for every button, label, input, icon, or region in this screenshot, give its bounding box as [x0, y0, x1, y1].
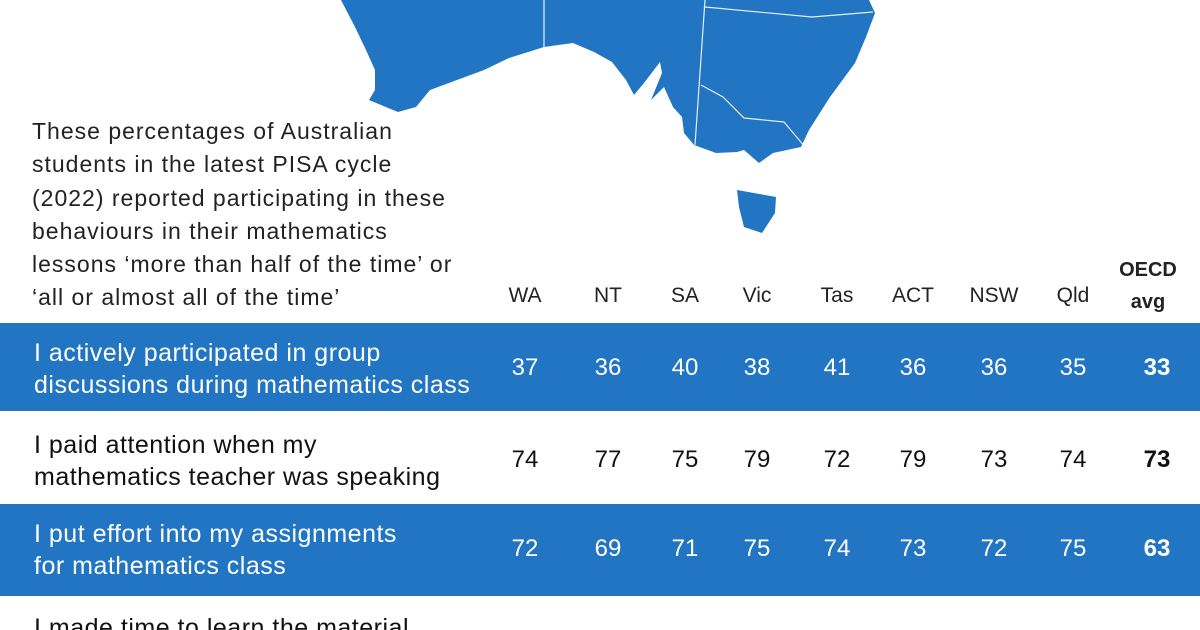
row 2: 74 [512, 446, 538, 473]
column headers: OECD [1119, 259, 1177, 281]
row 2: 79 [744, 446, 770, 473]
row 2: 73 [1144, 446, 1170, 473]
intro text: These percentages of Australian [32, 118, 393, 144]
row 3 [0, 504, 1200, 596]
row 1: 36 [900, 354, 926, 381]
column headers: WA [508, 284, 542, 307]
row 1: 41 [824, 354, 850, 381]
row 2: I paid attention when my [34, 431, 317, 459]
intro text: (2022) reported participating in these [32, 185, 446, 211]
column headers: SA [671, 284, 699, 307]
row 1: 36 [981, 354, 1007, 381]
column headers: avg [1131, 291, 1165, 313]
column headers: NT [594, 284, 622, 307]
column headers: Vic [743, 284, 771, 307]
row 2: 75 [672, 446, 698, 473]
row 2: 74 [1060, 446, 1086, 473]
row 3: 72 [512, 535, 538, 562]
column headers [508, 259, 1177, 313]
row 2 [34, 431, 1170, 491]
row 1: 33 [1144, 354, 1170, 381]
row 1: 37 [512, 354, 538, 381]
row 3: 63 [1144, 535, 1170, 562]
row 1: 35 [1060, 354, 1086, 381]
row 1: discussions during mathematics class [34, 371, 470, 399]
row 2: 79 [900, 446, 926, 473]
row 3: 75 [1060, 535, 1086, 562]
row 3: 74 [824, 535, 850, 562]
row 1: 36 [595, 354, 621, 381]
column headers: Qld [1057, 284, 1089, 307]
column headers: ACT [892, 284, 934, 307]
row 3: 69 [595, 535, 621, 562]
row 3: 72 [981, 535, 1007, 562]
row 3: 75 [744, 535, 770, 562]
column headers: NSW [970, 284, 1018, 307]
row 2: 73 [981, 446, 1007, 473]
row 2: mathematics teacher was speaking [34, 463, 440, 491]
intro text: lessons ‘more than half of the time’ or [32, 251, 452, 277]
intro text [32, 118, 452, 310]
intro text: ‘all or almost all of the time’ [32, 284, 340, 310]
row 3: 73 [900, 535, 926, 562]
row 2: 77 [595, 446, 621, 473]
row 3: I put effort into my assignments [34, 520, 397, 548]
row 1: 40 [672, 354, 698, 381]
column headers: Tas [821, 284, 853, 307]
intro text: students in the latest PISA cycle [32, 151, 392, 177]
row 1: I actively participated in group [34, 339, 381, 367]
row 3: for mathematics class [34, 552, 286, 580]
intro text: behaviours in their mathematics [32, 218, 388, 244]
row 2: 72 [824, 446, 850, 473]
row 1: 38 [744, 354, 770, 381]
row 3: 71 [672, 535, 698, 562]
row 1 [0, 323, 1200, 411]
map of Australia [341, 0, 875, 233]
